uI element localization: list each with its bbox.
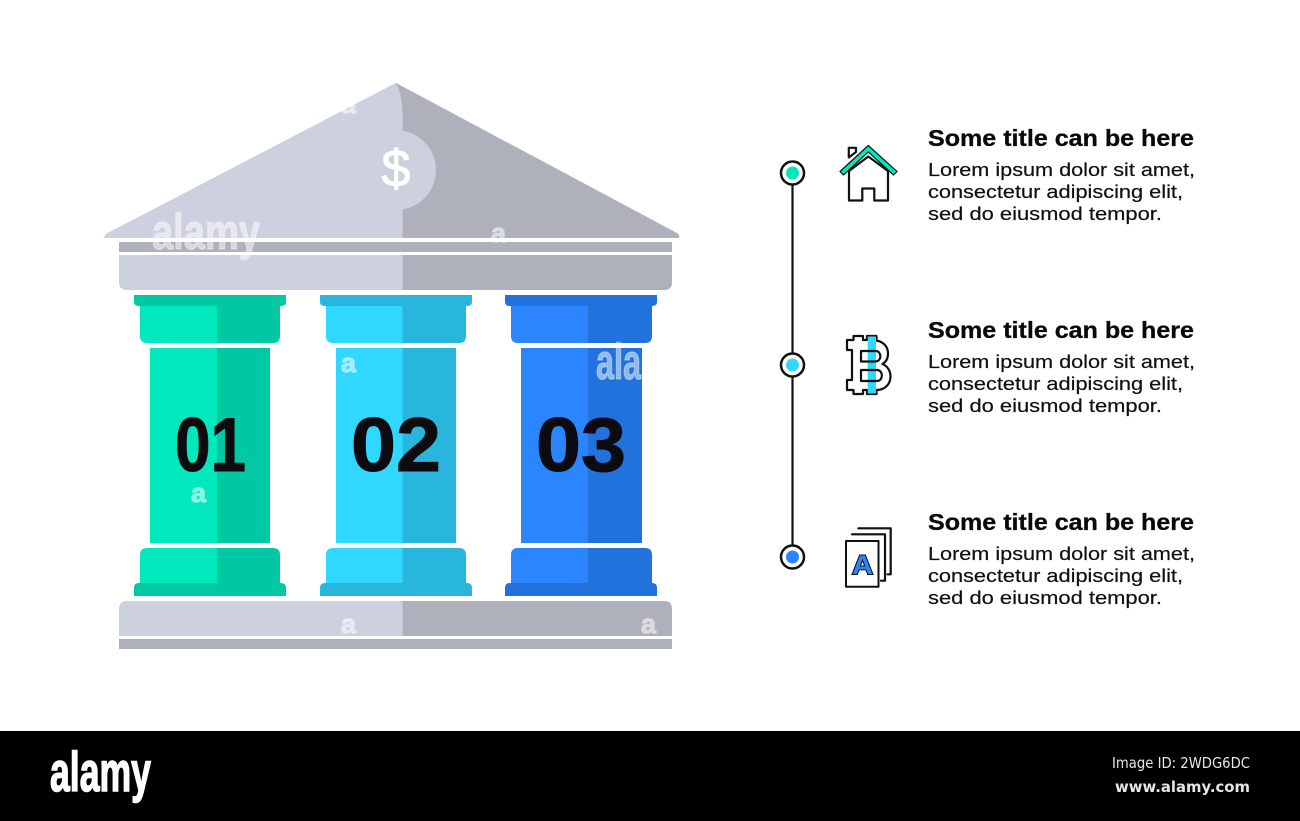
stock watermarks: ala xyxy=(596,334,642,390)
stock watermarks: alamy xyxy=(152,204,260,260)
timeline node 3 xyxy=(781,546,804,568)
column 02 xyxy=(320,295,472,596)
number 01: 01 xyxy=(175,403,246,488)
icon: bitcoin xyxy=(847,336,890,394)
alamy logo: alamy xyxy=(50,740,151,803)
timeline node 2 xyxy=(781,354,804,376)
text block 2: consectetur adipiscing elit, xyxy=(928,373,1183,394)
entablature xyxy=(119,242,672,290)
text block 2: Lorem ipsum dolor sit amet, xyxy=(928,351,1195,372)
text block 1: Some title can be here xyxy=(928,125,1194,151)
icon: dollar sign: $ xyxy=(382,140,411,198)
footer bar xyxy=(0,731,1300,821)
text block 2 xyxy=(928,317,1195,416)
image id: Image ID: 2WDG6DC xyxy=(1112,754,1250,772)
website: www.alamy.com xyxy=(1115,778,1250,796)
text block 3: consectetur adipiscing elit, xyxy=(928,565,1183,586)
stock watermarks: a xyxy=(341,609,357,639)
bank building illustration xyxy=(104,83,679,649)
timeline node 1 xyxy=(781,162,804,184)
timeline xyxy=(781,162,804,568)
icon: cards xyxy=(846,528,891,587)
text block 2: sed do eiusmod tempor. xyxy=(928,395,1162,416)
column 01 xyxy=(134,295,286,596)
stock watermarks: a xyxy=(341,348,357,378)
text block 3: sed do eiusmod tempor. xyxy=(928,587,1162,608)
roof pediment xyxy=(104,83,679,238)
icon: cards: A xyxy=(852,550,873,580)
text block 1: sed do eiusmod tempor. xyxy=(928,203,1162,224)
text block 3 xyxy=(928,509,1195,608)
text block 1: Lorem ipsum dolor sit amet, xyxy=(928,159,1195,180)
number 02: 02 xyxy=(351,403,441,488)
text block 1 xyxy=(928,125,1195,224)
stock watermarks: a xyxy=(641,609,657,639)
text block 1: consectetur adipiscing elit, xyxy=(928,181,1183,202)
text block 3: Lorem ipsum dolor sit amet, xyxy=(928,543,1195,564)
number 03: 03 xyxy=(536,403,626,488)
icon: house xyxy=(840,146,897,200)
column 03 xyxy=(505,295,657,596)
text block 3: Some title can be here xyxy=(928,509,1194,535)
stock watermarks: a xyxy=(191,478,207,508)
stock watermarks: a xyxy=(491,218,507,248)
plinth xyxy=(119,601,672,649)
stock watermarks xyxy=(152,89,657,639)
text block 2: Some title can be here xyxy=(928,317,1194,343)
stock watermarks: a xyxy=(341,89,357,119)
